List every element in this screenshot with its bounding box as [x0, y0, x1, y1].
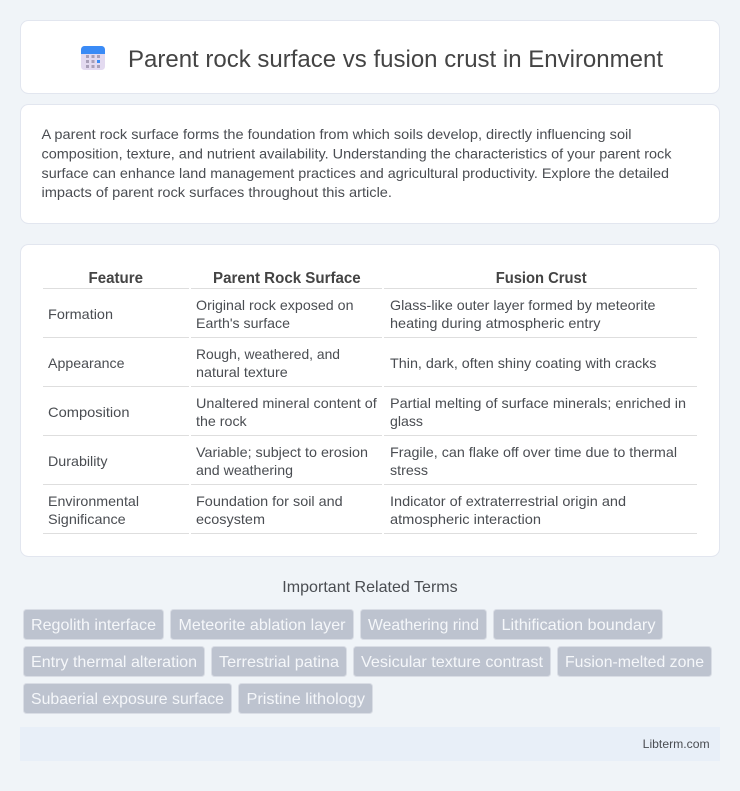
text block: intro	[42, 126, 673, 200]
panel: title header	[20, 20, 720, 94]
table row: Appearance: Rough, weathered, and	[196, 346, 340, 362]
table row: Environmental Significance: Foundation for soil and	[196, 493, 343, 509]
table row: Formation: Original rock exposed on	[196, 297, 354, 313]
title: Parent rock surface vs fusion crust in Environment	[128, 46, 663, 73]
tag: Fusion-melted zone	[558, 646, 712, 676]
table row: Formation: Formation	[48, 306, 113, 322]
footer credit: Libterm.com	[643, 737, 710, 751]
tag: Entry thermal alteration	[24, 646, 204, 676]
table header row: Fusion Crust	[496, 270, 587, 287]
table row: Formation: heating during atmospheric entry	[390, 315, 600, 331]
table row: Durability: Fragile, can flake off over time due to thermal	[390, 444, 677, 460]
tag: Meteorite ablation layer	[170, 610, 354, 640]
table row: Durability: Durability	[48, 453, 108, 469]
table header row: Parent Rock Surface	[213, 270, 361, 287]
tag: Lithification boundary: Lithification boundary	[502, 617, 656, 634]
table row: Durability	[43, 444, 697, 485]
table row: Appearance	[43, 346, 697, 387]
table header row: Feature	[88, 270, 143, 287]
tag: Subaerial exposure surface	[24, 684, 232, 714]
table header row	[43, 270, 697, 289]
tag: Weathering rind	[360, 610, 486, 640]
panel: intro paragraph	[20, 104, 720, 224]
tag: Entry thermal alteration: Entry thermal alteration	[31, 654, 197, 671]
table row: Composition	[43, 395, 697, 436]
table row: Appearance: natural texture	[196, 364, 288, 380]
table row: Composition: Composition	[48, 404, 130, 420]
tag: Pristine lithology: Pristine lithology	[246, 691, 365, 708]
table row: Composition: glass	[390, 413, 423, 429]
table row: Composition: Partial melting of surface minerals; enriched in	[390, 395, 686, 411]
tag: Lithification boundary	[494, 610, 662, 640]
tag: Subaerial exposure surface: Subaerial exposure surface	[31, 691, 224, 708]
table row: Durability: stress	[390, 462, 428, 478]
tag: Vesicular texture contrast: Vesicular texture contrast	[361, 654, 544, 671]
icon: calendar	[81, 46, 105, 70]
tag: Pristine lithology	[238, 684, 372, 714]
tag: Terrestrial patina	[212, 646, 346, 676]
tag: Meteorite ablation layer: Meteorite ablation layer	[178, 617, 346, 634]
table row: Durability: Variable; subject to erosion	[196, 444, 368, 460]
table row: Composition: Unaltered mineral content of	[196, 395, 377, 411]
table row: Formation: Earth's surface	[196, 315, 290, 331]
table row: Environmental Significance	[43, 493, 697, 534]
text block: intro: A parent rock surface forms the foundation from which soils develop, directly influencing soil	[42, 126, 632, 142]
table row: Durability: and weathering	[196, 462, 293, 478]
text block: intro: impacts of parent rock surfaces throughout this article.	[42, 184, 392, 200]
table row: Environmental Significance: ecosystem	[196, 511, 265, 527]
table row: Formation: Glass-like outer layer formed by meteorite	[390, 297, 656, 313]
table row: Composition: the rock	[196, 413, 248, 429]
table row: Appearance: Appearance	[48, 355, 125, 371]
table row: Environmental Significance: Significance	[48, 511, 126, 527]
tag: Regolith interface	[24, 610, 164, 640]
text block: intro: composition, texture, and nutrient availability. Understanding the characteristics of your parent rock	[42, 146, 673, 162]
tag: Regolith interface: Regolith interface	[31, 617, 156, 634]
table row: Environmental Significance: Environmental	[48, 493, 139, 509]
footer bar	[20, 727, 720, 761]
tag: Vesicular texture contrast	[354, 646, 550, 676]
table row: Environmental Significance: Indicator of extraterrestrial origin and	[390, 493, 626, 509]
table row: Environmental Significance: atmospheric interaction	[390, 511, 541, 527]
heading: important related terms: Important Related Terms	[282, 579, 458, 596]
panel: comparison table	[20, 244, 720, 556]
table row: Formation	[43, 297, 697, 338]
table row: Appearance: Thin, dark, often shiny coating with cracks	[390, 355, 656, 371]
panel: related term tags	[24, 610, 712, 714]
tag: Weathering rind: Weathering rind	[368, 617, 479, 634]
tag: Fusion-melted zone: Fusion-melted zone	[565, 654, 704, 671]
text block: intro: surface can enhance land management practices and agricultural productivity. Explore the detailed	[42, 165, 669, 181]
tag: Terrestrial patina: Terrestrial patina	[219, 654, 339, 671]
